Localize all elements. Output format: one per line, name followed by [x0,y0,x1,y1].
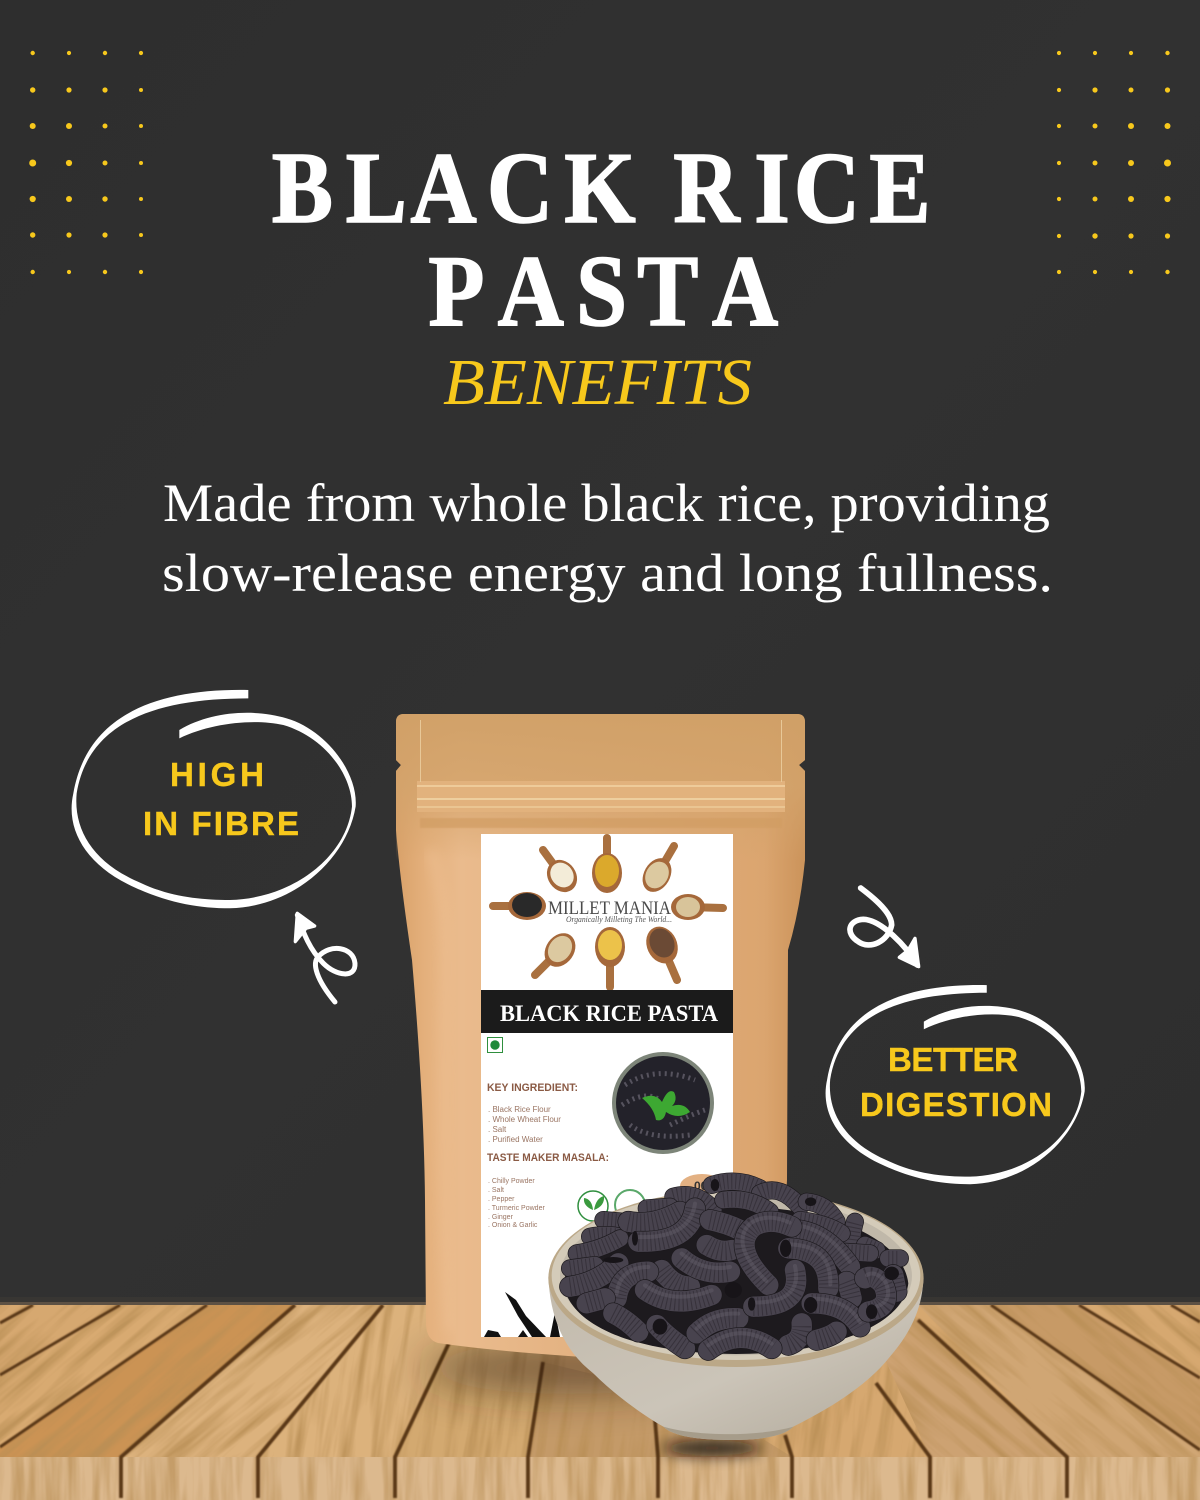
product name band: BLACK RICE PASTA [500,1001,718,1026]
callout text: HIGH [170,756,264,793]
decorative dots right [1057,51,1171,274]
taste maker list [487,1152,609,1229]
subtitle: benefits: BENEFITS [443,346,752,419]
key ingredient list: . Black Rice Flour [488,1105,551,1114]
taste maker list: . Ginger [488,1214,514,1221]
brand tagline: Organically Milleting The World... [566,915,672,924]
title: BLACK RICE [272,132,931,244]
description text: slow-release energy and long fullness. [162,543,1053,603]
wheat silhouette [484,1292,560,1337]
weight tag: 00g [694,1179,715,1193]
hand-drawn circle [72,690,356,908]
key ingredient list: KEY INGREDIENT: [487,1082,578,1094]
hand-drawn circle [826,985,1085,1184]
bowl of black rice macaroni [548,1179,924,1440]
key ingredient list [487,1082,578,1144]
title: PASTA [428,235,778,347]
pouch zip seal [417,720,785,1330]
pasta bowl photo on label [612,1052,714,1154]
bowl inside [560,1197,912,1355]
macaroni pile [570,1179,900,1350]
taste maker list: . Onion & Garlic [488,1222,538,1229]
callout text [860,1041,1052,1123]
bowl body [548,1277,923,1440]
pouch shadow [420,1342,720,1394]
certification badges [578,1190,645,1221]
title [272,132,931,347]
bowl rim [548,1190,924,1367]
callout text: BETTER [888,1041,1018,1078]
callout: better digestion [826,985,1085,1184]
arrow: to better digestion [850,888,919,967]
bowl shadow [662,1440,762,1456]
product pouch [396,714,805,1358]
taste maker list: TASTE MAKER MASALA: [487,1152,609,1164]
key ingredient list: . Purified Water [488,1135,543,1144]
taste maker list: . Chilly Powder [488,1178,535,1185]
wood grain [0,1305,1200,1500]
callout text: DIGESTION [860,1086,1052,1123]
veg mark [488,1038,502,1052]
description text: Made from whole black rice, providing [163,473,1050,533]
callout: high in fibre [72,690,356,908]
macaroni holes [603,1179,899,1335]
description text [162,473,1053,603]
callout text: IN FIBRE [143,805,299,842]
spoons of grains [493,838,723,987]
pouch label [481,834,733,1337]
wooden table [0,1297,1200,1500]
weight tag [680,1174,724,1198]
decorative dots left [29,51,143,274]
key ingredient list: . Salt [488,1125,507,1134]
callout text [143,756,299,842]
taste maker list: . Salt [488,1187,504,1194]
taste maker list: . Turmeric Powder [488,1205,545,1212]
arrow: to high in fibre [295,913,355,1002]
brand name: MILLET MANIA [548,898,671,919]
key ingredient list: . Whole Wheat Flour [488,1115,561,1124]
taste maker list: . Pepper [488,1196,515,1203]
product name band [481,990,733,1033]
